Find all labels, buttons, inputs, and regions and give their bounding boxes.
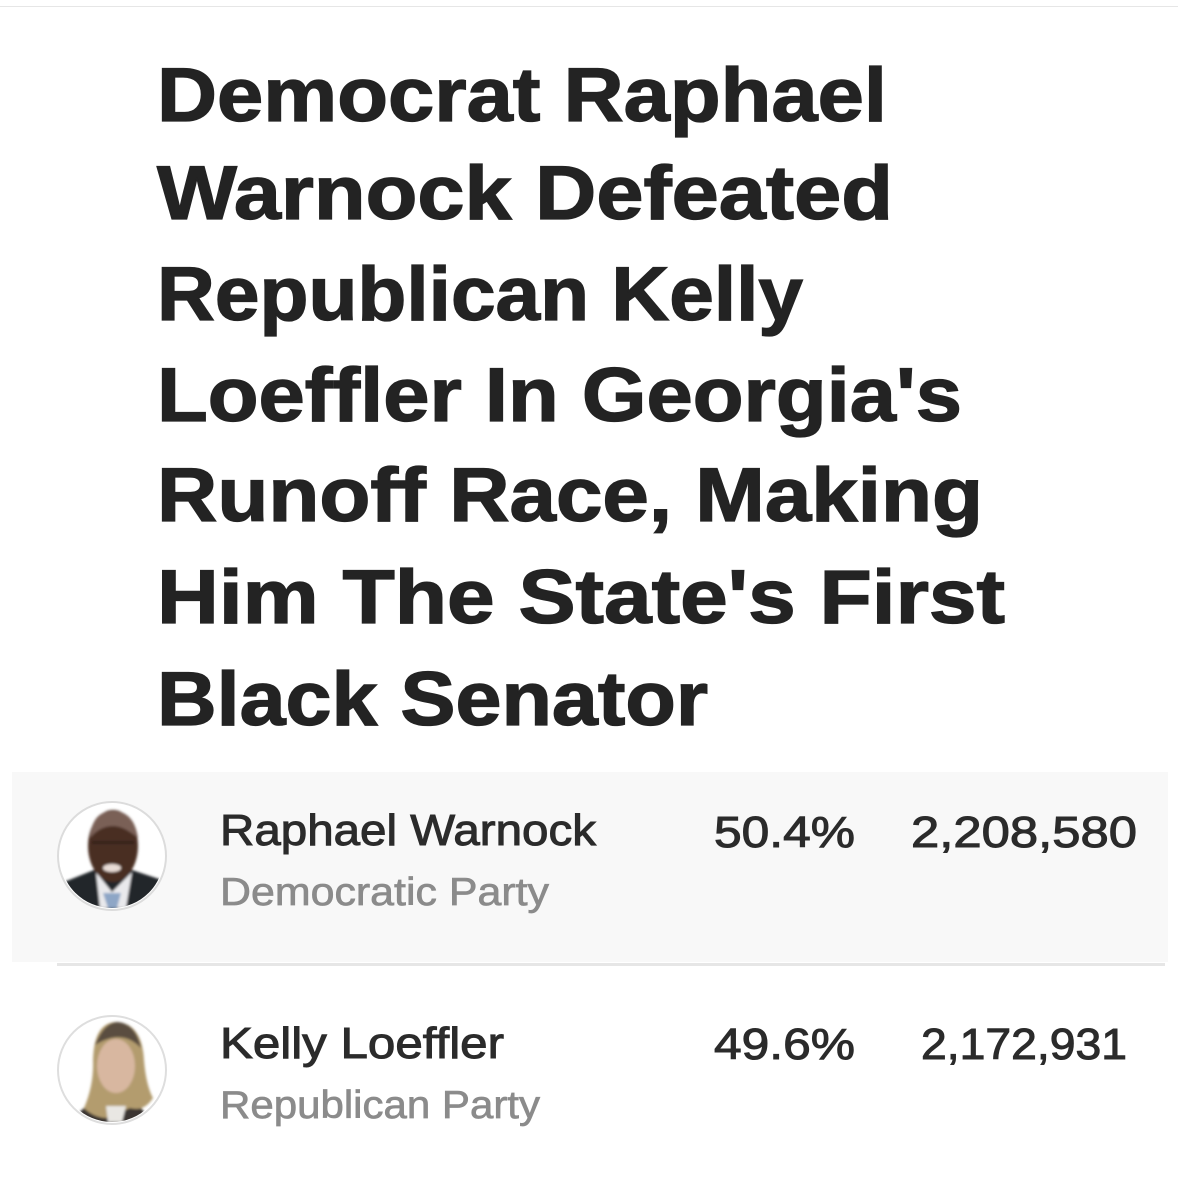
icon: Kelly Loeffler portrait (58, 1016, 166, 1125)
party label: Democratic Party (220, 871, 550, 914)
candidate name: Kelly Loeffler (220, 1019, 504, 1068)
title: Warnock Defeated (157, 151, 893, 236)
title: Runoff Race, Making (157, 453, 983, 538)
vote count: 2,172,931 (921, 1020, 1127, 1069)
panel: Loeffler result row (58, 1016, 1127, 1127)
vote percentage: 50.4% (714, 808, 855, 857)
title: Democrat Raphael (157, 53, 887, 138)
title: Republican Kelly (157, 252, 803, 337)
party label: Republican Party (220, 1084, 541, 1127)
title: Black Senator (157, 657, 708, 742)
icon: Raphael Warnock portrait (58, 802, 166, 915)
candidate name: Raphael Warnock (220, 806, 597, 855)
vote count: 2,208,580 (911, 808, 1137, 857)
panel: Warnock result row (57, 801, 1136, 914)
title: Loeffler In Georgia's (157, 353, 962, 438)
vote percentage: 49.6% (714, 1020, 855, 1069)
title (157, 53, 1005, 742)
title: Him The State's First (157, 555, 1005, 640)
